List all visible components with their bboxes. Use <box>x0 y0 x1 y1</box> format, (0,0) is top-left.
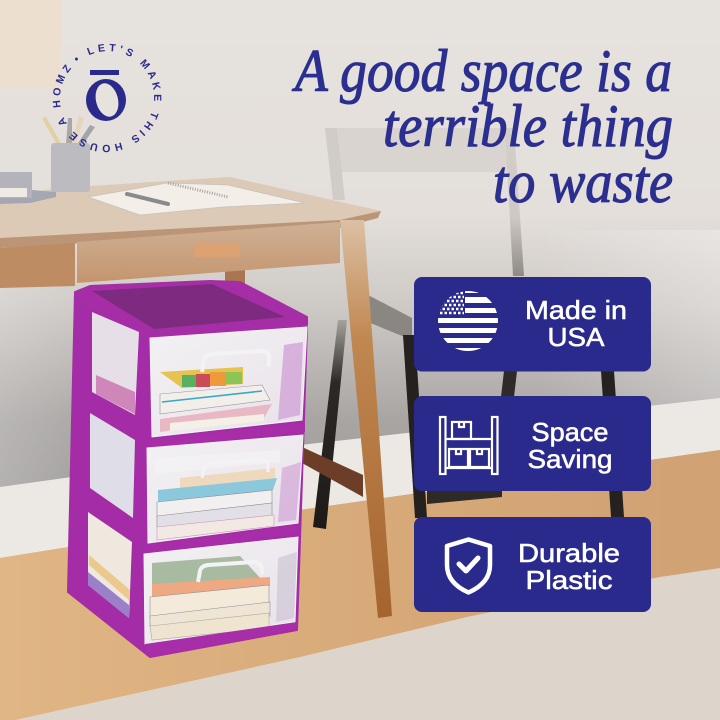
badge: durable plastic <box>414 517 651 612</box>
desk back stretcher <box>302 447 363 497</box>
label <box>525 295 627 352</box>
heading: to waste <box>493 149 673 215</box>
label: Plastic <box>526 565 612 595</box>
wooden floor <box>0 450 720 720</box>
bottom drawer <box>144 537 298 644</box>
heading: A good space is a <box>291 38 672 104</box>
middle drawer <box>147 435 303 543</box>
top drawer handle <box>202 351 269 372</box>
rail two <box>145 525 300 554</box>
brand logo badge <box>52 44 162 152</box>
top drawer <box>150 327 307 437</box>
icon: shelf with boxes <box>440 417 498 474</box>
label: Saving <box>528 444 612 474</box>
icon: shield with check <box>447 540 490 592</box>
desk drawer handle <box>194 244 240 257</box>
bottom drawer handle <box>198 562 262 582</box>
pen cup <box>42 116 95 192</box>
wall picture frame <box>0 0 62 87</box>
icon: US flag <box>438 291 498 351</box>
unit lid <box>75 281 307 338</box>
top drawer books <box>160 385 272 432</box>
top drawer colourful blocks <box>160 367 243 388</box>
badge: space saving <box>414 396 651 491</box>
desk <box>0 177 392 618</box>
middle drawer books <box>157 468 277 540</box>
desk leg <box>340 220 392 618</box>
storage drawer unit <box>68 281 307 657</box>
label <box>518 538 620 595</box>
side windows <box>88 312 139 618</box>
heading <box>291 38 673 215</box>
label: Made in <box>525 295 627 325</box>
circular tagline: • LET'S MAKE THIS HOUSE A HOMZ <box>52 44 162 152</box>
stack of books on desk <box>0 172 56 204</box>
bottom drawer books <box>150 556 270 640</box>
badge: made in USA <box>414 277 651 372</box>
bottom rail <box>145 622 297 657</box>
notebook and pen <box>88 183 305 215</box>
label: USA <box>548 322 605 352</box>
heading: terrible thing <box>383 93 673 159</box>
label: Space <box>532 417 608 447</box>
wall background <box>0 0 720 560</box>
unit frame <box>68 293 307 657</box>
baseboard <box>0 398 720 558</box>
rail one <box>148 423 305 448</box>
rug <box>15 568 720 720</box>
label: Durable <box>518 538 620 568</box>
chair <box>313 128 624 529</box>
middle drawer handle <box>202 460 268 478</box>
logo mark <box>86 70 126 121</box>
label <box>528 417 612 474</box>
